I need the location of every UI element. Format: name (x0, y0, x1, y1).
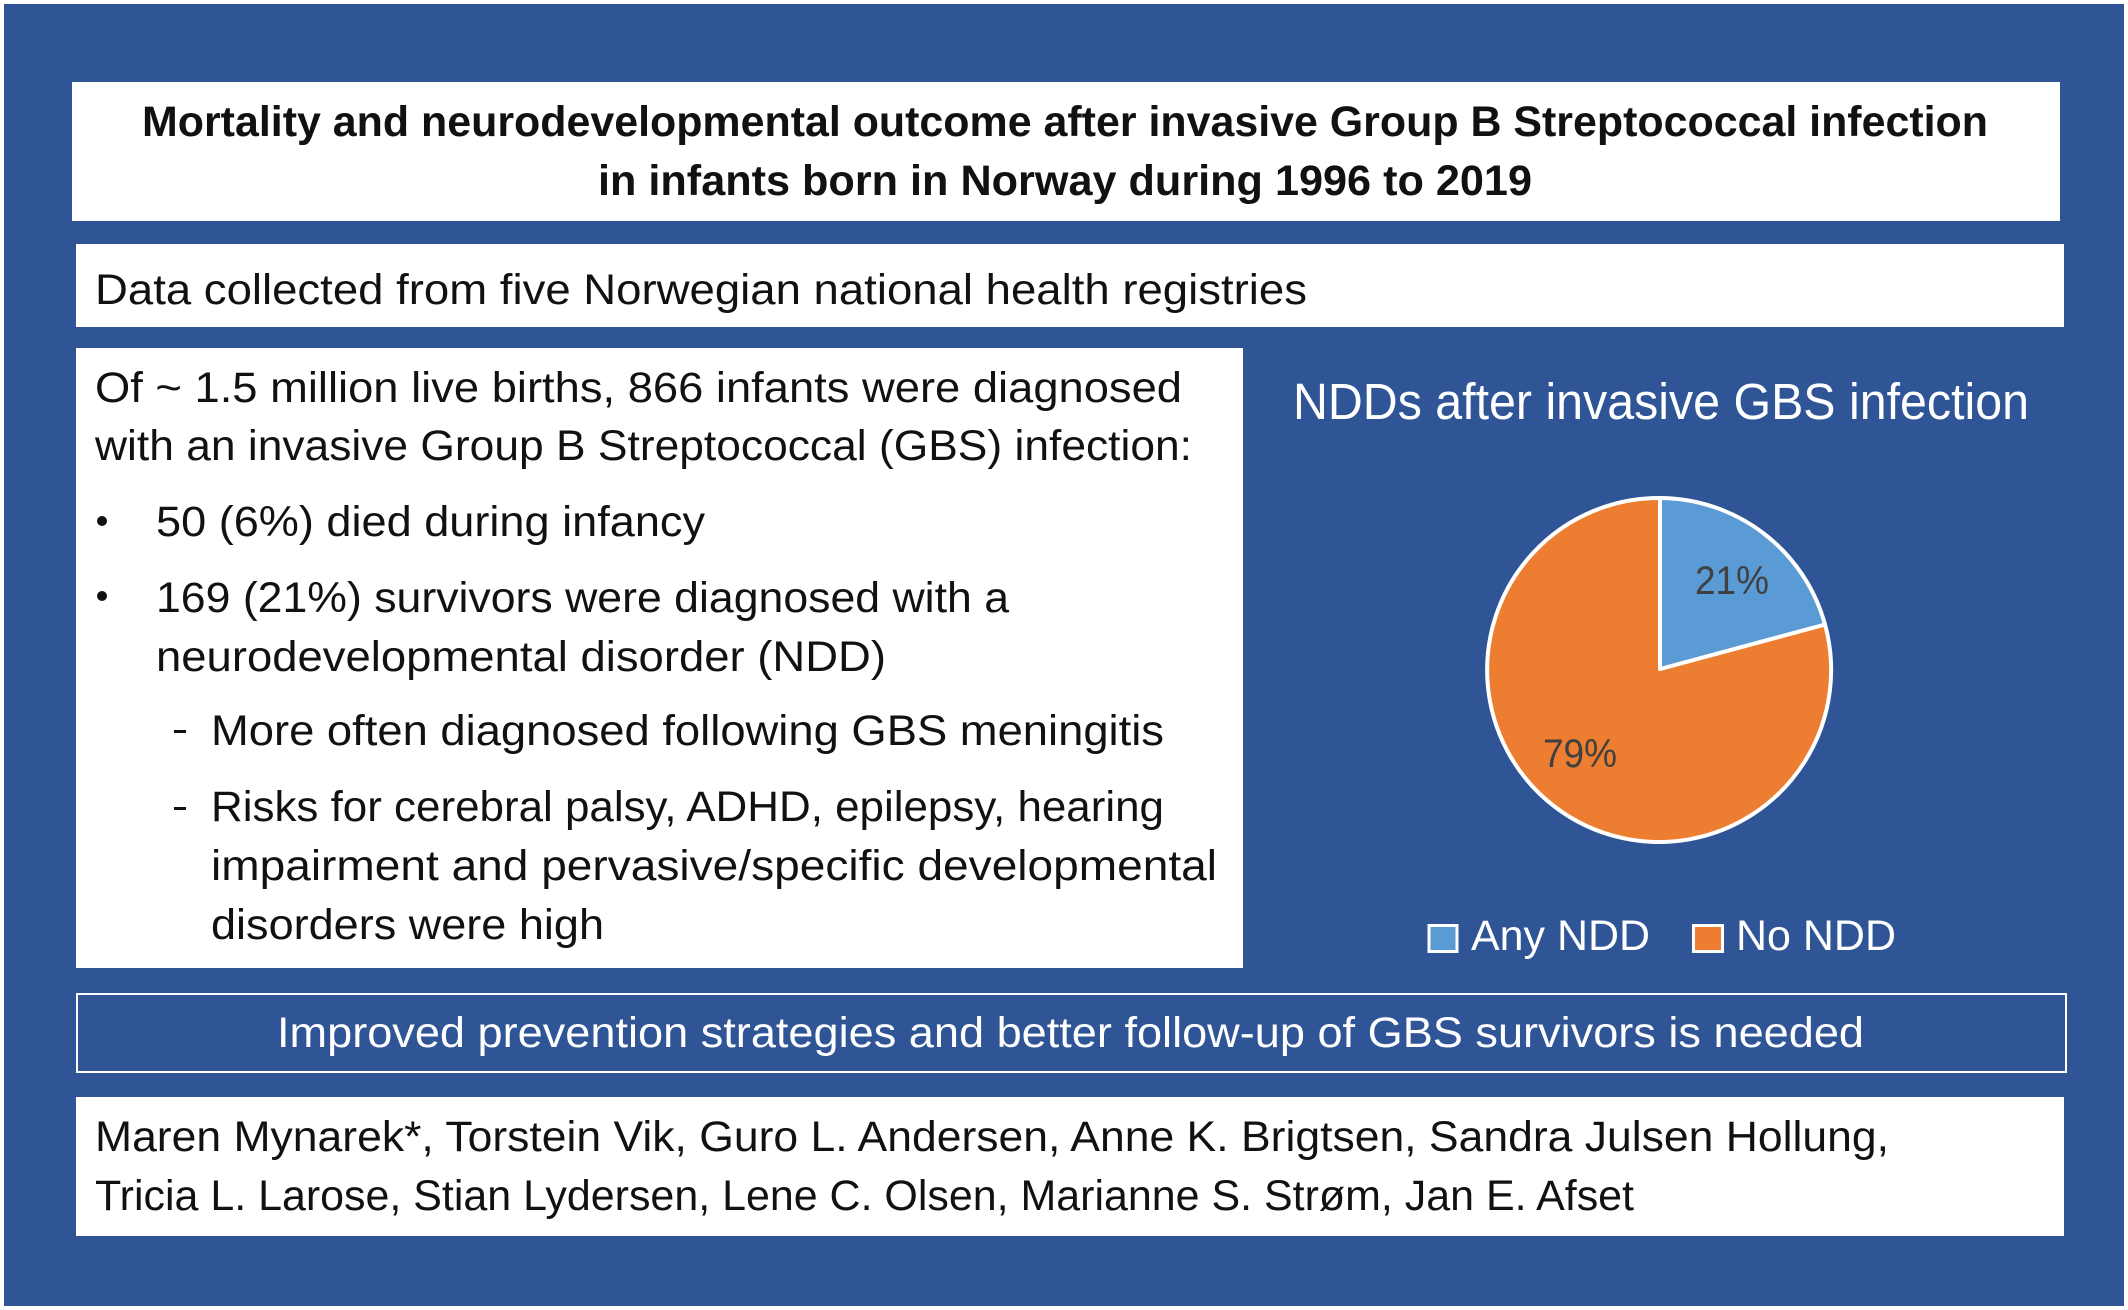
title: Mortality and neurodevelopmental outcome after invasive Group B Streptococcal infection (142, 98, 1988, 146)
sub-bullet: risks (174, 783, 1217, 949)
pie slice: Any NDD 21% (1660, 498, 1825, 669)
chart heading: NDDs after invasive GBS infection (1293, 373, 2029, 430)
pie chart (1487, 498, 1831, 842)
callout: conclusion: Improved prevention strategies and better follow-up of GBS survivors is needed (277, 1009, 1864, 1057)
panel: authors: Maren Mynarek*, Torstein Vik, Guro L. Andersen, Anne K. Brigtsen, Sandra Julsen Hollung, (95, 1113, 1889, 1161)
panel: key findings (76, 348, 1243, 968)
pie slice: No NDD 79% (1487, 498, 1831, 842)
panel: data source: Data collected from five Norwegian national health registries (95, 266, 1307, 314)
sub-bullet: risks: disorders were high (211, 901, 604, 949)
label: 79%: 79% (1543, 732, 1617, 776)
sub-bullet: risks: Risks for cerebral palsy, ADHD, epilepsy, hearing (211, 783, 1164, 831)
bullet: survivors with NDD (97, 574, 1009, 681)
callout: conclusion (77, 994, 2066, 1072)
panel: authors (76, 1097, 2064, 1236)
intro text: Of ~ 1.5 million live births, 866 infants were diagnosed (95, 364, 1182, 412)
sub-bullet: risks: impairment and pervasive/specific developmental (211, 842, 1217, 890)
panel: authors: Tricia L. Larose, Stian Lydersen, Lene C. Olsen, Marianne S. Strøm, Jan E. Afset (95, 1172, 1634, 1220)
panel: data source (76, 244, 2064, 327)
title (72, 82, 2060, 221)
label: 21%: 21% (1695, 559, 1769, 603)
bullet: deaths: 50 (6%) died during infancy (156, 498, 706, 546)
legend: Any NDD: Any NDD (1471, 912, 1650, 960)
sub-bullet: meningitis: More often diagnosed following GBS meningitis (211, 707, 1164, 755)
intro text (94, 364, 1192, 470)
legend: No NDD: No NDD (1736, 912, 1896, 960)
chart legend (1429, 912, 1896, 960)
bullet: survivors with NDD: 169 (21%) survivors were diagnosed with a (156, 574, 1009, 622)
intro text: with an invasive Group B Streptococcal (GBS) infection: (94, 422, 1192, 470)
bullet: survivors with NDD: neurodevelopmental disorder (NDD) (156, 633, 886, 681)
title: in infants born in Norway during 1996 to 2019 (598, 157, 1532, 205)
